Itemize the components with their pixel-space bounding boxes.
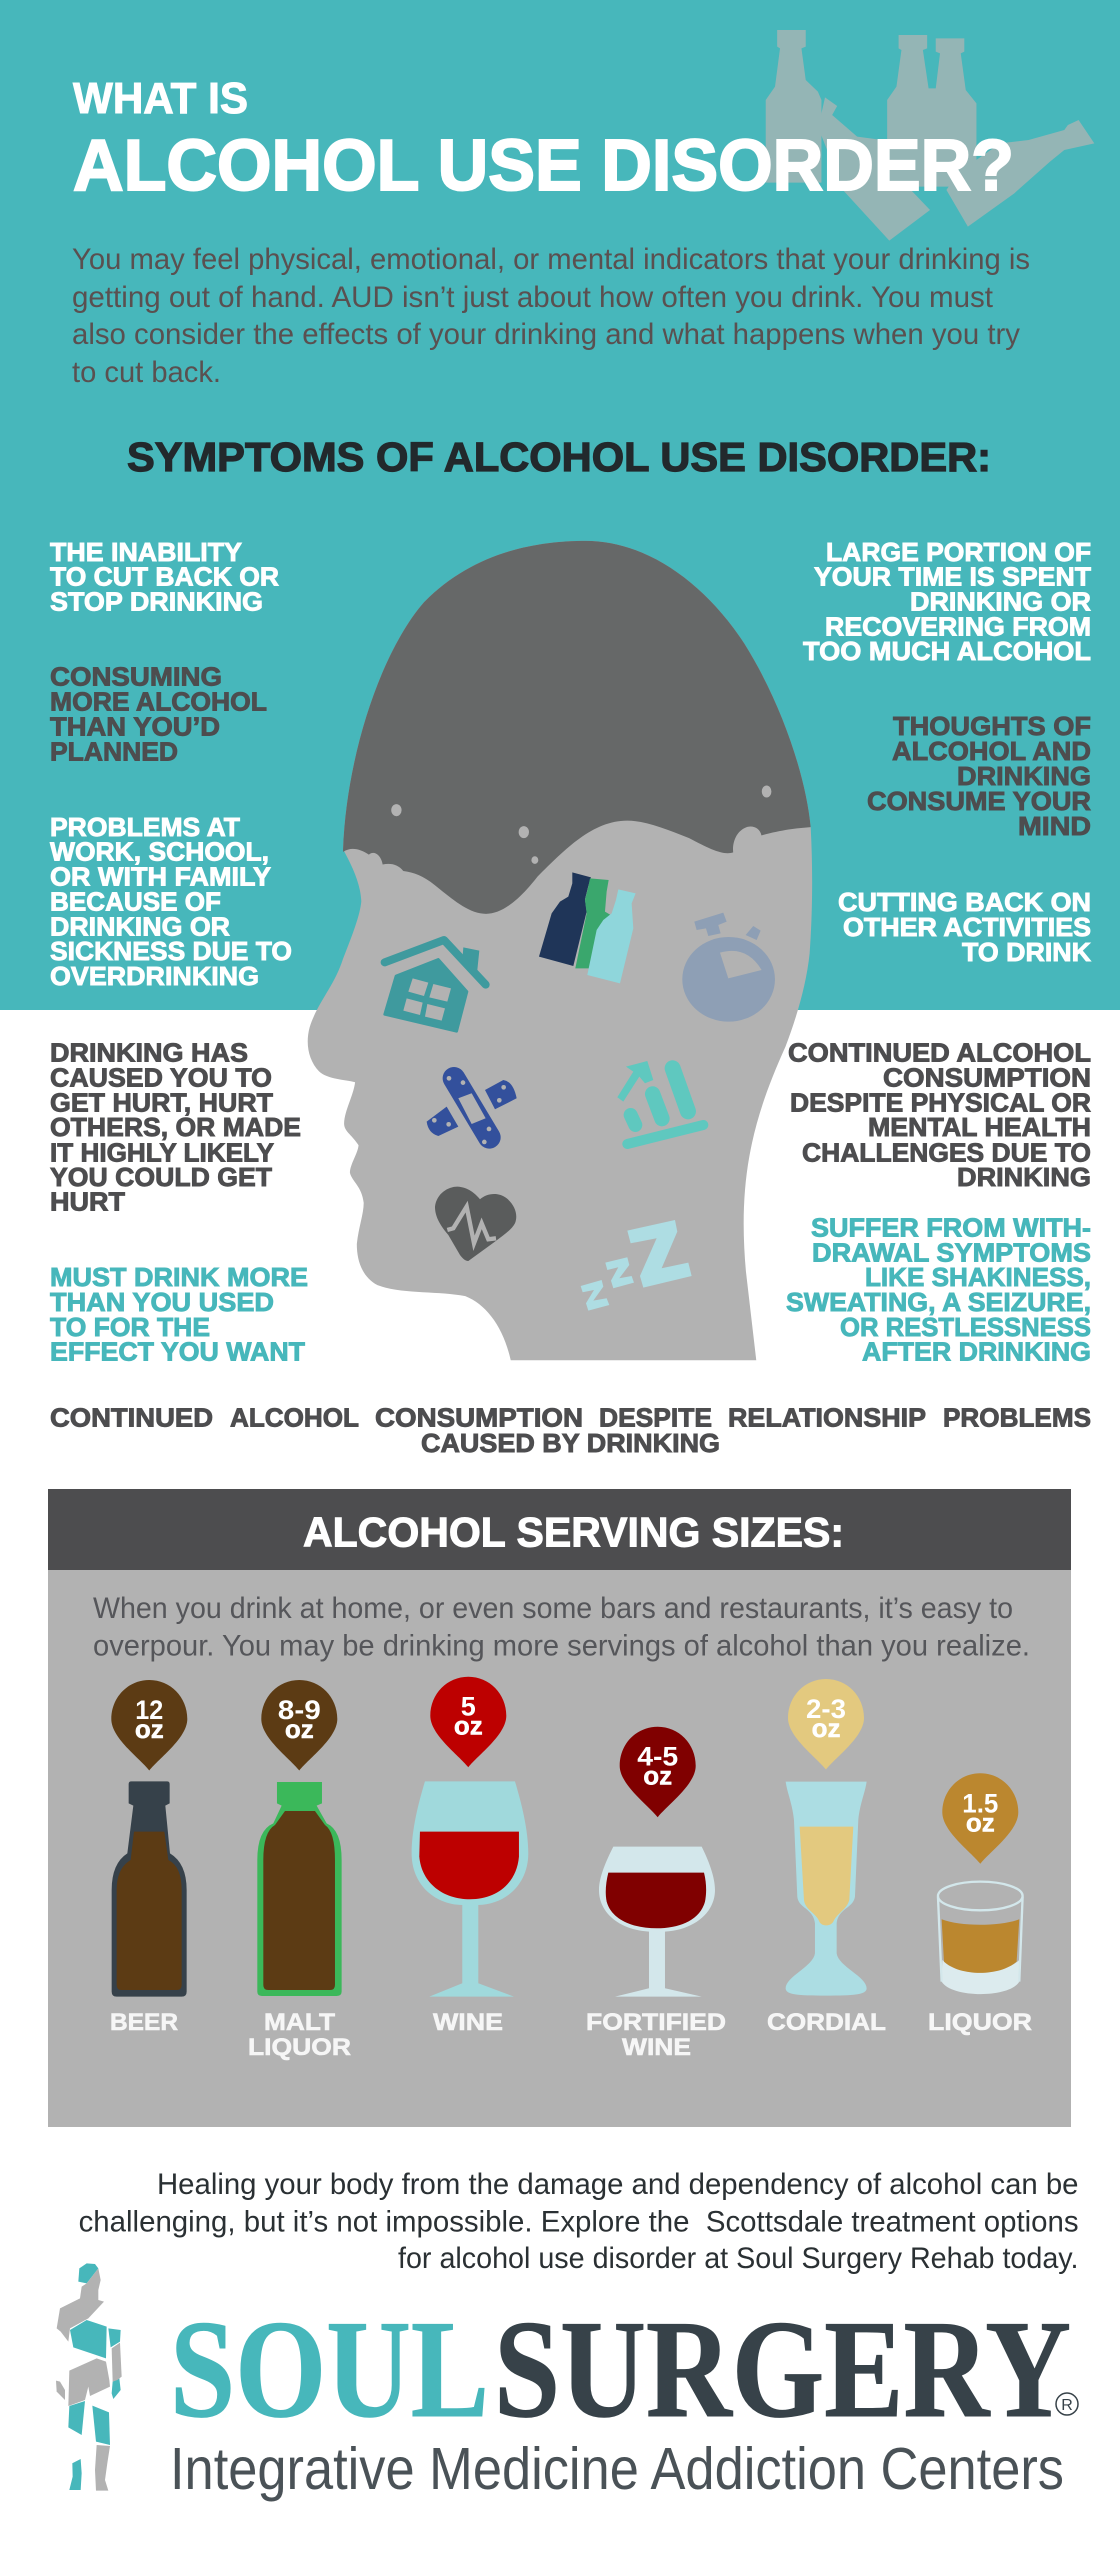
text block: left symptom 3: BECAUSE OF (50, 886, 221, 916)
text block: left symptom 3: WORK, SCHOOL, (50, 836, 269, 866)
text block: right symptom 5: OR RESTLESSNESS (840, 1312, 1091, 1342)
text block: left symptom 4: YOU COULD GET (50, 1162, 272, 1192)
text block: bottom symptom: ALCOHOL (230, 1402, 359, 1432)
text block: closing message (79, 2168, 1079, 2275)
label: malt liquor: LIQUOR (248, 2034, 351, 2061)
panel: serving sizes header band (48, 1489, 1071, 1570)
text block: bottom symptom: PROBLEMS (943, 1402, 1091, 1432)
text block: serving intro: When you drink at home, or even some bars and restaurants, it’s easy to (93, 1592, 1013, 1625)
icon: wine glass (412, 1781, 528, 1997)
text block: right symptom 2: THOUGHTS OF (893, 711, 1091, 741)
callout: 4-5 oz pin: oz (643, 1761, 672, 1791)
text block: right symptom 1 (803, 537, 1091, 666)
callout: 12 oz pin: 12 (135, 1695, 163, 1725)
callout: 5 oz pin: oz (454, 1711, 483, 1741)
label: fortified wine: FORTIFIED (586, 2009, 726, 2036)
text block: introduction: getting out of hand. AUD isn’t just about how often you drink. You must (72, 281, 994, 314)
text block: introduction: also consider the effects of your drinking and what happens when you try (72, 318, 1020, 351)
callout: 2-3 oz pin: oz (812, 1713, 840, 1743)
text block: introduction: to cut back. (72, 356, 221, 389)
text block: bottom symptom: RELATIONSHIP (728, 1402, 926, 1432)
icon: sleeping zzz (581, 1220, 692, 1311)
icon: beer bottle (112, 1781, 187, 1997)
text block: left symptom 4: IT HIGHLY LIKELY (50, 1138, 274, 1168)
logo: registered mark: R (1061, 2397, 1073, 2414)
text block: bottom symptom: CONTINUED (50, 1402, 213, 1432)
illustration: head silhouette (308, 541, 812, 1360)
label: liquor: LIQUOR (928, 2009, 1032, 2036)
text block: left symptom 3 (50, 812, 292, 991)
text block: right symptom 4: CONTINUED ALCOHOL (788, 1038, 1091, 1068)
text block: bottom symptom: CAUSED BY DRINKING (421, 1428, 720, 1458)
callout: 1.5 oz pin: oz (966, 1807, 995, 1837)
text block: introduction: You may feel physical, emotional, or mental indicators that your drinking is (72, 243, 1030, 276)
text block: left symptom 4: DRINKING HAS (50, 1038, 248, 1068)
text block: introduction (72, 243, 1030, 389)
text block: right symptom 5 (786, 1212, 1091, 1366)
text block: closing message: Healing your body from the damage and dependency of alcohol can be (157, 2168, 1078, 2201)
text block: left symptom 1: THE INABILITY (50, 537, 242, 567)
text block: bottom symptom: DESPITE (599, 1402, 712, 1432)
text block: right symptom 4: DESPITE PHYSICAL OR (790, 1088, 1091, 1118)
icon: house (385, 940, 486, 1031)
text block: left symptom 5: EFFECT YOU WANT (50, 1336, 305, 1366)
head: lower liquid silhouette (308, 541, 812, 1360)
text block: left symptom 3: OVERDRINKING (50, 961, 259, 991)
text block: right symptom 4: MENTAL HEALTH (868, 1112, 1091, 1142)
text block: right symptom 5: AFTER DRINKING (862, 1336, 1091, 1366)
text block: right symptom 2: MIND (1018, 811, 1091, 841)
text block: right symptom 4 (788, 1038, 1091, 1192)
icon: cordial glass (786, 1782, 867, 1996)
text block: right symptom 1: YOUR TIME IS SPENT (814, 562, 1091, 592)
text block: right symptom 4: CONSUMPTION (883, 1062, 1091, 1092)
callout: 2-3 oz pin: 2-3 (806, 1694, 846, 1724)
callout: 8-9 oz pin (261, 1680, 337, 1770)
icon: logo figure (56, 2263, 122, 2491)
text block: left symptom 1: STOP DRINKING (50, 586, 263, 616)
heading: what is: WHAT IS (73, 75, 248, 123)
text block: right symptom 1: LARGE PORTION OF (826, 537, 1091, 567)
logo: registered mark (1056, 2393, 1078, 2415)
text block: left symptom 4: HURT (50, 1186, 125, 1216)
text block: left symptom 5: MUST DRINK MORE (50, 1262, 308, 1292)
text block: left symptom 4: OTHERS, OR MADE (50, 1112, 301, 1142)
text block: right symptom 2 (867, 711, 1091, 841)
text block: right symptom 3: TO DRINK (962, 937, 1091, 967)
callout: 8-9 oz pin: 8-9 (278, 1695, 321, 1725)
text block: right symptom 1: TOO MUCH ALCOHOL (803, 636, 1091, 666)
callout: 12 oz pin (111, 1680, 187, 1770)
heading: serving sizes: ALCOHOL SERVING SIZES: (303, 1508, 844, 1556)
icon: stopwatch (682, 913, 775, 1022)
text block: right symptom 4: DRINKING (957, 1162, 1091, 1192)
label: cordial: CORDIAL (767, 2009, 886, 2036)
text block: right symptom 5: DRAWAL SYMPTOMS (812, 1238, 1091, 1268)
text block: left symptom 2: THAN YOU’D (50, 712, 220, 742)
icon: heart with pulse (435, 1187, 516, 1261)
text block: left symptom 4 (50, 1038, 301, 1216)
text block: left symptom 1 (50, 537, 279, 616)
label: fortified wine: WINE (622, 2034, 691, 2061)
text block: bottom symptom: CONSUMPTION (375, 1402, 583, 1432)
text block: right symptom 4: CHALLENGES DUE TO (802, 1138, 1091, 1168)
text block: left symptom 5 (50, 1262, 308, 1366)
text block: left symptom 1: TO CUT BACK OR (50, 562, 279, 592)
head: dark dome (343, 541, 811, 914)
text block: right symptom 3: OTHER ACTIVITIES (843, 912, 1091, 942)
callout: 2-3 oz pin (788, 1679, 864, 1770)
callout: 5 oz pin (430, 1677, 506, 1767)
text block: serving intro (93, 1592, 1030, 1662)
label: malt liquor (248, 2009, 351, 2061)
text block: bottom symptom (50, 1402, 1091, 1458)
text block: right symptom 3 (838, 887, 1091, 967)
panel: teal top background (0, 0, 1120, 1010)
text block: left symptom 5: TO FOR THE (50, 1312, 210, 1342)
text block: right symptom 5: LIKE SHAKINESS, (865, 1262, 1091, 1292)
label: fortified wine (586, 2009, 726, 2061)
text block: closing message: challenging, but it’s not impossible. Explore the Scottsdale treatment options (79, 2206, 1079, 2239)
heading: symptoms: SYMPTOMS OF ALCOHOL USE DISORDER: (127, 434, 991, 480)
text block: right symptom 2: DRINKING (957, 761, 1091, 791)
callout: 12 oz pin: oz (135, 1714, 164, 1744)
text block: serving intro: overpour. You may be drinking more servings of alcohol than you realize. (93, 1630, 1030, 1662)
icon: faded background bottles (766, 30, 1094, 241)
icon: bandage (427, 1076, 517, 1144)
label: beer: BEER (110, 2009, 178, 2036)
icon: rising bar chart (617, 1061, 703, 1144)
text block: left symptom 2: PLANNED (50, 736, 178, 766)
icon: liquor glass (938, 1882, 1023, 1994)
text block: left symptom 2 (50, 662, 267, 766)
text block: left symptom 5: THAN YOU USED (50, 1287, 274, 1317)
callout: 5 oz pin: 5 (461, 1692, 476, 1722)
callout: 1.5 oz pin: 1.5 (962, 1788, 998, 1818)
label: malt liquor: MALT (264, 2009, 335, 2036)
text block: right symptom 1: RECOVERING FROM (825, 612, 1091, 642)
illustration: icons inside the head (385, 872, 775, 1311)
text block: left symptom 4: GET HURT, HURT (50, 1088, 273, 1118)
label: wine: WINE (433, 2009, 503, 2036)
text block: right symptom 2: ALCOHOL AND (892, 736, 1091, 766)
callout: 4-5 oz pin (620, 1727, 696, 1817)
text block: closing message: for alcohol use disorder at Soul Surgery Rehab today. (398, 2242, 1078, 2275)
panel: serving sizes background (48, 1489, 1071, 2127)
text block: left symptom 2: CONSUMING (50, 662, 222, 692)
callout: 8-9 oz pin: oz (285, 1714, 314, 1744)
title: alcohol use disorder: ALCOHOL USE DISORDER? (73, 125, 1014, 206)
text block: left symptom 3: PROBLEMS AT (50, 812, 240, 842)
text block: left symptom 3: SICKNESS DUE TO (50, 936, 292, 966)
text block: left symptom 4: CAUSED YOU TO (50, 1062, 272, 1092)
icon: three bottles (539, 872, 636, 983)
text block: right symptom 5: SWEATING, A SEIZURE, (786, 1287, 1091, 1317)
callout: 1.5 oz pin (942, 1773, 1018, 1864)
text block: left symptom 3: DRINKING OR (50, 912, 230, 942)
text block: right symptom 3: CUTTING BACK ON (838, 887, 1091, 917)
bubbles (391, 785, 771, 864)
text block: left symptom 2: MORE ALCOHOL (50, 686, 267, 716)
text block: right symptom 2: CONSUME YOUR (867, 786, 1091, 816)
icon: fortified wine glass (599, 1847, 715, 1997)
logo: soul: SOUL (170, 2292, 489, 2447)
text block: right symptom 5: SUFFER FROM WITH- (811, 1212, 1091, 1242)
text block: left symptom 3: OR WITH FAMILY (50, 862, 271, 892)
callout: 4-5 oz pin: 4-5 (637, 1742, 678, 1772)
icon: malt liquor bottle (257, 1782, 342, 1996)
text block: right symptom 1: DRINKING OR (910, 586, 1091, 616)
